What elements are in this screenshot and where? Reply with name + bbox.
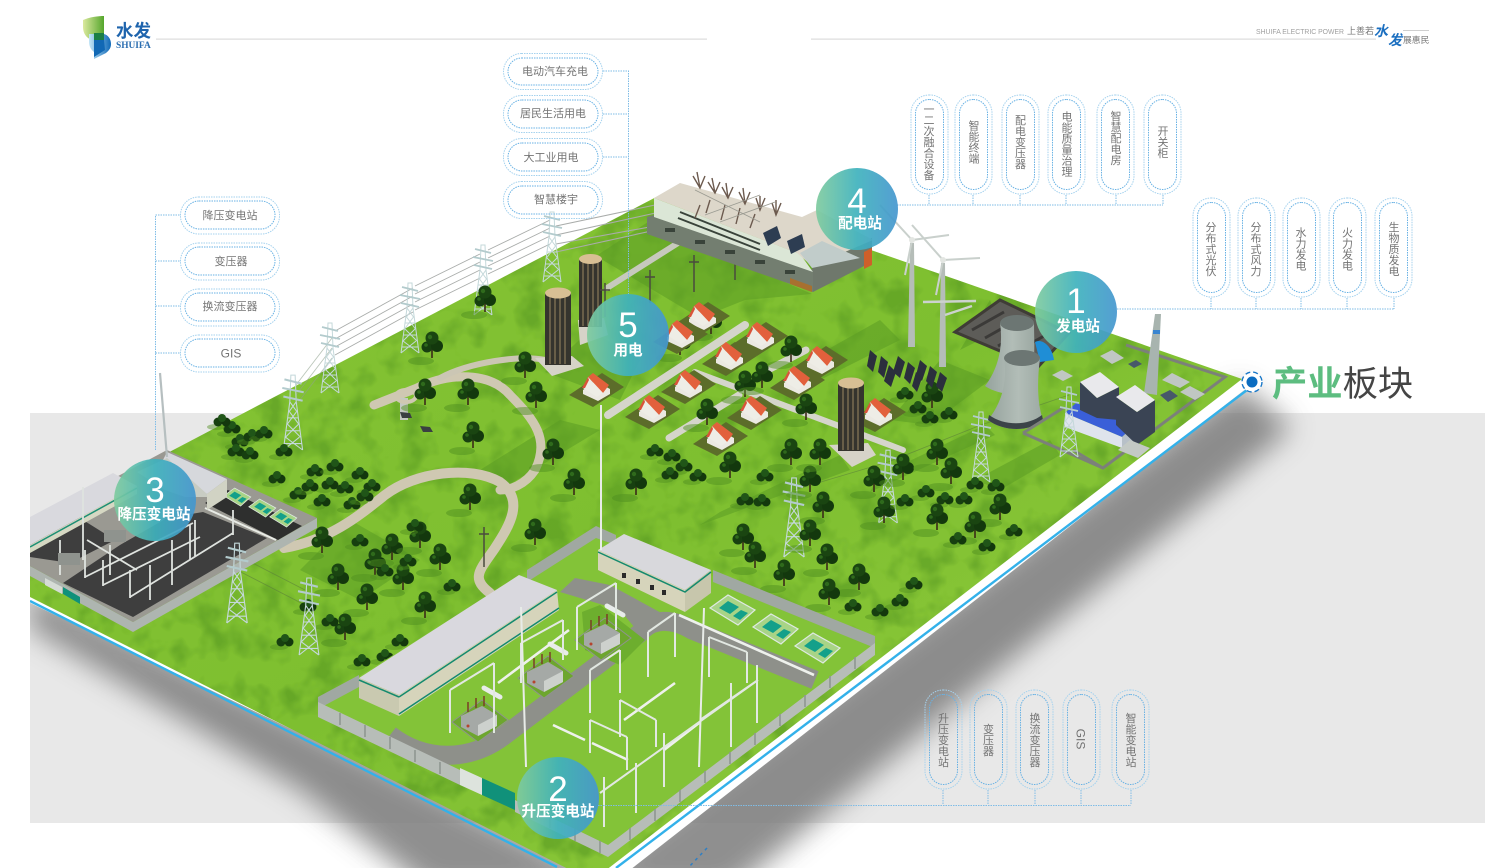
pill: 分布式光伏 <box>1193 198 1230 297</box>
footpaths <box>284 243 903 593</box>
header rule lines <box>156 30 1429 40</box>
header slogan: 发 <box>1388 32 1404 48</box>
pill: 换流变压器 <box>180 289 280 326</box>
header slogan <box>1256 23 1430 48</box>
callout 3: step-down substation: 降压变电站 <box>118 505 191 523</box>
board shadow <box>30 385 1292 868</box>
pill: 水力发电 <box>1283 198 1320 297</box>
pill: 大工业用电 <box>504 138 602 176</box>
leader: step-down substation <box>156 215 181 450</box>
gray background band <box>30 413 1485 823</box>
callout 1: power generation: 发电站 <box>1056 317 1100 335</box>
header logo: SHUIFA <box>116 41 151 51</box>
callout 3: step-down substation: 3 <box>145 471 165 510</box>
pill: 火力发电 <box>1329 198 1366 297</box>
pill: 居民生活用电: 居民生活用电 <box>520 106 586 120</box>
pill: 降压变电站: 降压变电站 <box>202 208 258 222</box>
pill: 一二次融合设备: 一二次融合设备 <box>922 104 934 181</box>
small service yard <box>396 390 433 432</box>
utility poles <box>479 247 740 567</box>
step-down substation <box>30 373 317 632</box>
skyscrapers <box>535 254 876 467</box>
board edge <box>30 380 1248 868</box>
callout 2: step-up substation: 2 <box>548 770 568 809</box>
header slogan: 展惠民 <box>1403 34 1430 45</box>
pill: 水力发电: 水力发电 <box>1294 227 1306 271</box>
callout 1: power generation <box>1035 271 1117 353</box>
pill: 开关柜: 开关柜 <box>1156 126 1168 159</box>
pill: 火力发电: 火力发电 <box>1340 227 1353 271</box>
ground shadows <box>300 222 1060 600</box>
header slogan: 水 <box>1374 23 1389 39</box>
pill: 变压器 <box>180 243 280 280</box>
pill: 升压变电站: 升压变电站 <box>936 712 949 768</box>
header slogan: 上善若 <box>1347 25 1374 36</box>
pill: 换流变压器 <box>1016 690 1053 789</box>
pill: 升压变电站 <box>925 690 962 789</box>
pill: 变压器 <box>970 690 1007 789</box>
leader: generation <box>1117 298 1394 309</box>
pill: 生物质发电 <box>1375 198 1412 297</box>
industrial park scene <box>20 172 1252 868</box>
pill: 开关柜 <box>1144 95 1181 194</box>
callout 4: distribution station: 4 <box>847 182 867 221</box>
green ground <box>30 184 1242 868</box>
pill: 变压器: 变压器 <box>214 254 248 268</box>
pill: 生物质发电: 生物质发电 <box>1387 220 1400 276</box>
solar panels <box>867 350 947 392</box>
decorative blue dash <box>688 848 707 868</box>
transmission towers <box>282 212 991 557</box>
tree clusters <box>207 286 1022 670</box>
title marker <box>1242 372 1262 392</box>
callout 4: distribution station: 配电站 <box>838 215 882 232</box>
coal yard <box>955 300 1069 367</box>
wind turbines <box>896 221 980 367</box>
header logo <box>83 16 151 59</box>
header slogan: SHUIFA ELECTRIC POWER <box>1256 27 1344 36</box>
pill: 配电变压器: 配电变压器 <box>1014 114 1026 170</box>
pill: 电动汽车充电: 电动汽车充电 <box>522 64 588 78</box>
pill: 分布式光伏: 分布式光伏 <box>1204 221 1216 276</box>
pill: 配电变压器 <box>1002 95 1039 194</box>
title: 产业板块 <box>1272 365 1413 404</box>
pill: 智能变电站 <box>1112 690 1149 789</box>
callout 5: electricity use <box>587 294 669 376</box>
pill: 变压器: 变压器 <box>982 722 994 757</box>
pill: 分布式风力 <box>1238 198 1275 297</box>
pill: 电能质量治理 <box>1048 95 1085 194</box>
callout 1: power generation: 1 <box>1066 282 1086 321</box>
leader: distribution <box>897 195 1163 205</box>
callout 4: distribution station <box>816 168 898 250</box>
pill: 智能变电站: 智能变电站 <box>1124 711 1136 768</box>
pill: 一二次融合设备 <box>911 95 948 194</box>
pill: GIS <box>1063 690 1100 789</box>
pill: 智慧楼宇: 智慧楼宇 <box>534 192 578 206</box>
grass texture <box>30 184 1242 868</box>
step-up substation <box>318 405 875 857</box>
pill: 智能终端: 智能终端 <box>967 119 980 165</box>
pill: 智能终端 <box>955 95 992 194</box>
pill: 分布式风力: 分布式风力 <box>1249 221 1262 276</box>
callout 5: electricity use: 用电 <box>613 342 643 359</box>
pill: 换流变压器: 换流变压器 <box>1028 711 1040 768</box>
callout 3: step-down substation <box>114 459 196 541</box>
callout 2: step-up substation <box>517 757 599 839</box>
pill: 降压变电站 <box>180 197 280 234</box>
foreground towers <box>226 543 320 655</box>
pill: GIS: GIS <box>221 346 241 360</box>
pill: 居民生活用电 <box>504 96 602 132</box>
transmission wires <box>237 205 1069 605</box>
pill: 换流变压器: 换流变压器 <box>202 299 258 313</box>
pill: 大工业用电: 大工业用电 <box>524 150 578 164</box>
pill: GIS: GIS <box>1074 729 1088 749</box>
pill: 电能质量治理: 电能质量治理 <box>1060 111 1072 177</box>
houses <box>569 302 906 456</box>
callout 5: electricity use: 5 <box>618 306 638 345</box>
pill: 智慧配电房 <box>1097 95 1134 194</box>
callout 2: step-up substation: 升压变电站 <box>522 802 595 820</box>
leader: step-up substation <box>598 790 1131 806</box>
pill: GIS <box>180 335 280 372</box>
pill: 智慧楼宇 <box>504 182 602 218</box>
cooling towers <box>985 315 1054 429</box>
pill: 电动汽车充电 <box>504 54 602 90</box>
distribution station building <box>647 172 873 292</box>
pill: 智慧配电房: 智慧配电房 <box>1109 109 1122 166</box>
header logo: 水发 <box>116 21 151 41</box>
leader: consumption <box>603 71 628 295</box>
power plant <box>1023 314 1225 468</box>
